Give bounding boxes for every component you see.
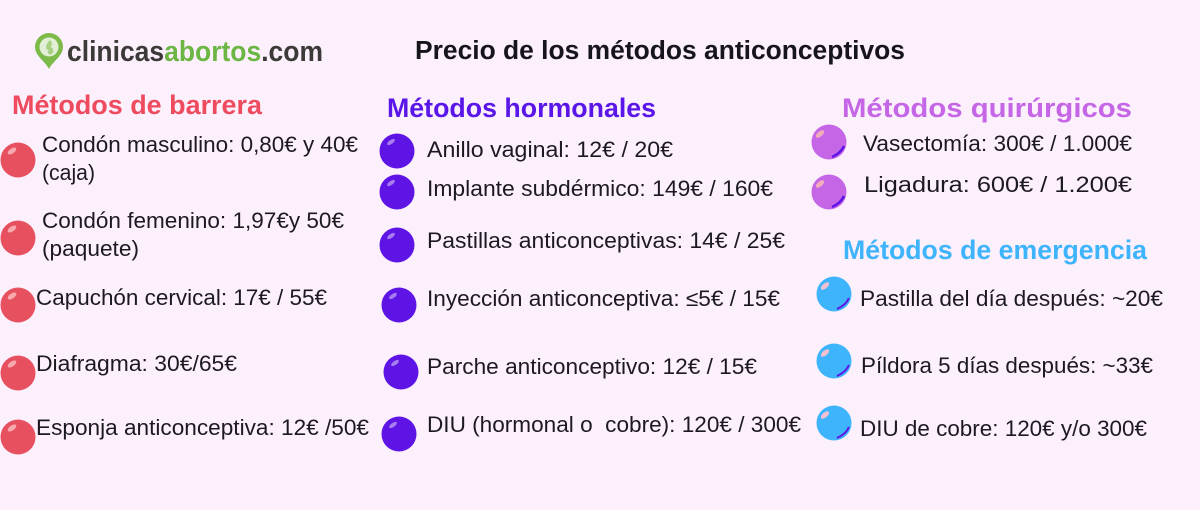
panel: barrier methods bbox=[0, 90, 369, 454]
panel: emergency methods bbox=[816, 235, 1163, 441]
item: anillo vaginal: Anillo vaginal: 12€ / 20€ bbox=[427, 137, 673, 162]
item: capuchón cervical: Capuchón cervical: 17€ / 55€ bbox=[36, 285, 327, 310]
item: anillo vaginal bbox=[380, 134, 673, 168]
item: DIU hormonal o cobre: DIU (hormonal o cobre): 120€ / 300€ bbox=[427, 412, 801, 437]
item: píldora 5 días después bbox=[816, 344, 1153, 378]
item: condón masculino: (caja) bbox=[42, 160, 95, 185]
item: inyección anticonceptiva: Inyección anticonceptiva: ≤5€ / 15€ bbox=[427, 286, 780, 311]
item: esponja anticonceptiva: Esponja anticonceptiva: 12€ /50€ bbox=[36, 415, 369, 440]
item: pastilla del día después bbox=[816, 276, 1163, 312]
heading: Métodos de emergencia: Métodos de emergencia bbox=[843, 235, 1148, 265]
item: pastillas anticonceptivas bbox=[380, 228, 785, 262]
item: pastilla del día después: Pastilla del día después: ~20€ bbox=[860, 286, 1163, 311]
panel: hormonal methods bbox=[380, 93, 801, 452]
item: condón femenino: (paquete) bbox=[42, 236, 139, 261]
logo wordmark: clinicasabortos.com bbox=[67, 36, 323, 68]
icon: map pin bbox=[35, 33, 63, 69]
heading: Métodos quirúrgicos: Métodos quirúrgicos bbox=[842, 93, 1132, 123]
item: vasectomía bbox=[812, 124, 1132, 160]
item: pastillas anticonceptivas: Pastillas anticonceptivas: 14€ / 25€ bbox=[427, 228, 785, 253]
item: esponja anticonceptiva bbox=[0, 415, 369, 454]
item: diafragma bbox=[0, 351, 237, 390]
item: píldora 5 días después: Píldora 5 días después: ~33€ bbox=[861, 353, 1153, 378]
item: parche anticonceptivo: Parche anticonceptivo: 12€ / 15€ bbox=[427, 354, 757, 379]
item: DIU de cobre bbox=[816, 406, 1147, 441]
item: inyección anticonceptiva bbox=[382, 286, 780, 322]
item: implante subdérmico bbox=[380, 174, 773, 210]
item: diafragma: Diafragma: 30€/65€ bbox=[36, 351, 237, 376]
heading: Métodos hormonales: Métodos hormonales bbox=[387, 93, 656, 123]
item: ligadura bbox=[812, 172, 1132, 210]
panel: surgical methods bbox=[812, 93, 1132, 210]
item: condón masculino: Condón masculino: 0,80€ y 40€ bbox=[42, 132, 358, 157]
item: condón femenino: Condón femenino: 1,97€y 50€ bbox=[42, 208, 344, 233]
item: condón femenino bbox=[0, 208, 344, 261]
item: parche anticonceptivo bbox=[384, 354, 757, 390]
item: capuchón cervical bbox=[0, 285, 327, 322]
item: condón masculino bbox=[0, 132, 358, 185]
title: Precio de los métodos anticonceptivos bbox=[415, 37, 905, 65]
heading: Métodos de barrera: Métodos de barrera bbox=[12, 90, 263, 120]
item: implante subdérmico: Implante subdérmico: 149€ / 160€ bbox=[427, 176, 773, 201]
item: DIU hormonal o cobre bbox=[382, 412, 801, 452]
logo: clinicasabortos.com bbox=[35, 33, 323, 69]
item: DIU de cobre: DIU de cobre: 120€ y/o 300€ bbox=[860, 416, 1147, 441]
item: vasectomía: Vasectomía: 300€ / 1.000€ bbox=[863, 131, 1132, 156]
item: ligadura: Ligadura: 600€ / 1.200€ bbox=[864, 172, 1132, 197]
